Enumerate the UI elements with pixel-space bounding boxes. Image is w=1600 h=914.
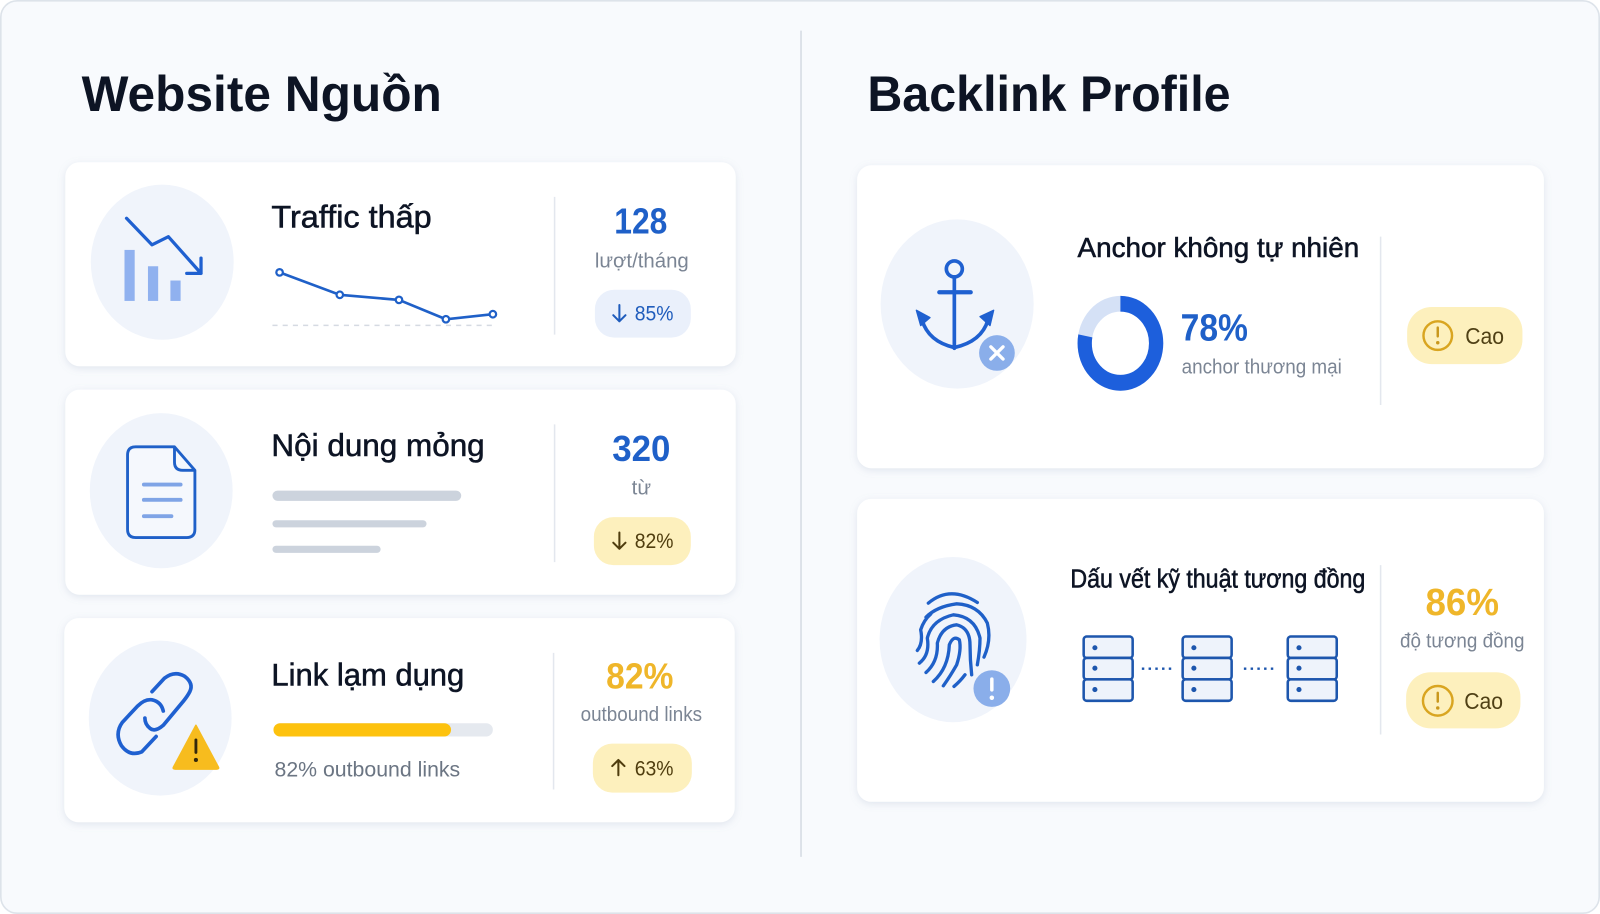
progress caption: 82% outbound links [274,757,460,781]
badge: Cao: Cao [1465,323,1504,349]
stat: 82%: 82% [606,657,673,697]
stat: 86%: 86% [1426,581,1499,623]
column divider [800,31,802,857]
panel: Anchor không tự nhiên [857,165,1544,468]
panel: Dấu vết kỹ thuật tương đồng [857,499,1544,802]
placeholder text lines [272,491,461,553]
card title: Nội dung mỏng [271,427,485,463]
card title: Anchor không tự nhiên [1078,232,1359,263]
stat label: outbound links [581,704,702,726]
donut chart 78% [1085,304,1156,383]
stat label: độ tương đồng [1400,631,1524,653]
stat: 78%: 78% [1181,307,1248,349]
icon: anchor with x badge [881,219,1034,389]
badge: down 82%: 82% [635,529,673,553]
heading: Backlink Profile: Backlink Profile [867,66,1231,122]
card title: Link lạm dụng [271,657,464,692]
server 1 [1084,637,1133,701]
stat label: anchor thương mại [1182,356,1342,378]
stat: 128: 128 [614,202,667,242]
card title: Dấu vết kỹ thuật tương đồng [1070,566,1365,594]
badge: down 82% [594,517,691,565]
progress bar 82% [273,723,493,737]
panel: Traffic thấp [65,162,736,366]
badge: down 85%: 85% [635,301,673,325]
panel: Link lạm dụng [64,618,735,822]
stat: 320: 320 [612,429,670,469]
stat label: lượt/tháng [595,250,689,272]
badge: Cao [1407,307,1522,364]
badge: up 63% [593,744,692,793]
server 3 [1288,637,1337,701]
icon: document [90,413,233,568]
panel: Nội dung mỏng [65,390,736,595]
icon: broken link with warning [89,641,232,796]
server 2 [1183,637,1232,701]
icon: falling traffic chart [91,185,234,340]
badge: down 85% [595,290,691,338]
badge: Cao [1406,672,1520,728]
sparkline chart [272,269,497,325]
icon: fingerprint with alert [880,557,1027,722]
badge: up 63%: 63% [635,756,673,780]
server diagram [1084,637,1337,701]
heading: Website Nguồn: Website Nguồn [82,66,442,122]
card title: Traffic thấp [271,198,432,234]
stat label: từ [632,478,651,500]
badge: Cao: Cao [1464,688,1503,714]
